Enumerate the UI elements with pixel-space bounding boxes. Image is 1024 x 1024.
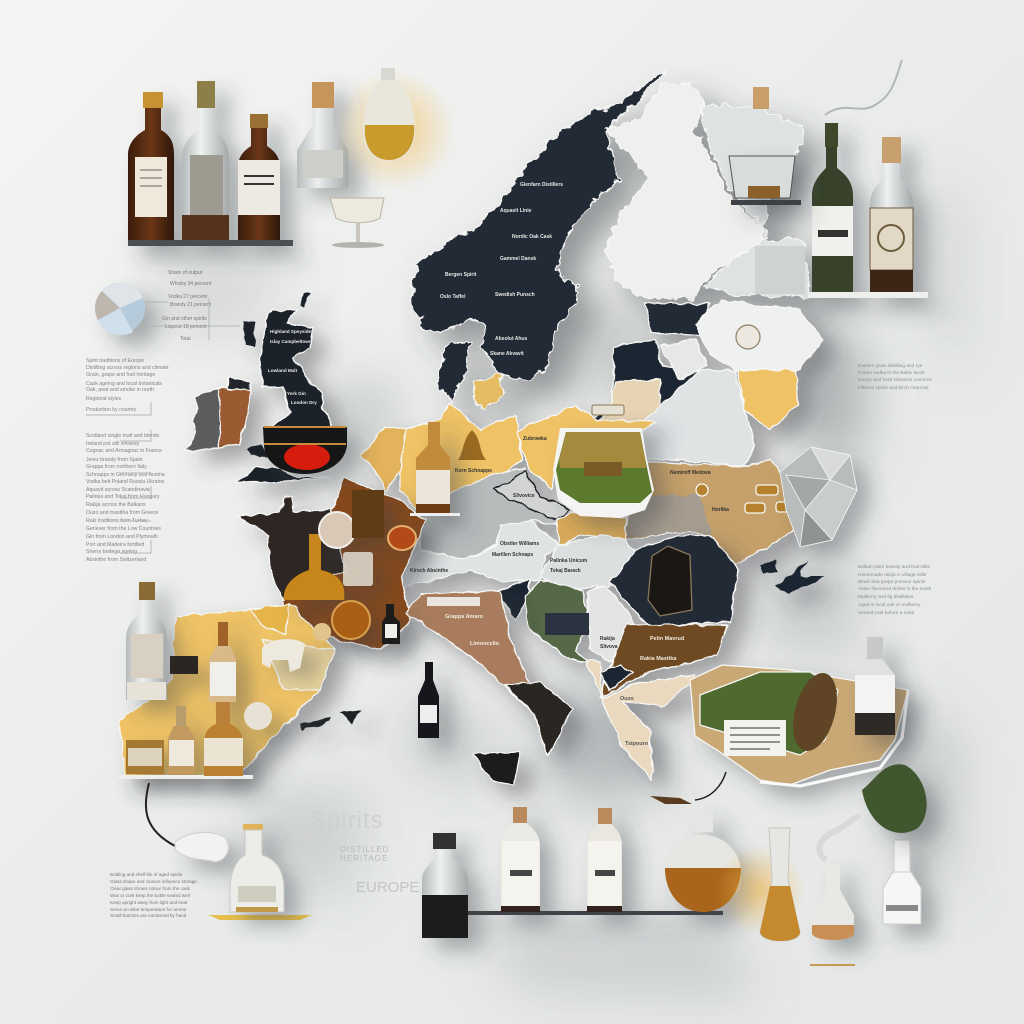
chart annotation text: Gin and other spirits	[162, 316, 207, 322]
country: Ireland west	[185, 388, 220, 450]
UK labels: London Dry	[291, 400, 317, 405]
text block: left column bottom: Aquavit across Scandinavia	[86, 487, 150, 493]
country: Romania	[610, 535, 738, 626]
icon: leaf plate	[175, 832, 228, 862]
country: Netherlands	[360, 428, 406, 492]
text block: left column top: Oak, peat and smoke in north	[86, 387, 154, 393]
text block: left column top: Cask ageing and local botanicals	[86, 381, 162, 387]
flask: small	[812, 864, 854, 940]
map details: Norway labels: Swedish Punsch	[495, 292, 535, 298]
mini building relief	[755, 246, 805, 294]
text block: right top: Honey and herb infusions common	[858, 377, 932, 383]
Ulster dark cap	[228, 378, 250, 391]
embossed heading: EUROPE	[356, 879, 419, 896]
text block: right middle: Anise flavoured drinks in the south	[858, 586, 932, 592]
chart annotation text: Share of output	[168, 270, 203, 276]
Hebrides	[243, 293, 311, 457]
icon: smoke curl	[819, 815, 860, 860]
picture: forest landscape	[553, 428, 654, 518]
text block: bottom left: Wax or cork keep the bottle sealed well	[110, 893, 190, 898]
Sicily	[472, 752, 520, 784]
Central Europe labels: Marillen Schnaps	[492, 552, 533, 558]
bottle: slim	[209, 622, 236, 702]
Central Europe labels	[410, 436, 729, 650]
Central Europe labels: Slivovice	[513, 493, 535, 499]
country: Croatia and Serbia	[525, 580, 590, 662]
bottle: Germany	[410, 422, 460, 516]
chart annotation text: Brandy 21 percent	[170, 302, 211, 308]
text block: right top: Potato vodka in the Baltic lands	[858, 370, 926, 376]
country: Bulgaria north	[587, 585, 642, 662]
amber bottle illustration	[648, 546, 692, 616]
small gold bar	[810, 964, 855, 966]
country: north Russia	[700, 105, 810, 296]
brass knobs	[696, 484, 796, 513]
text block: bottom left: Clear glass shows colour from the cask	[110, 886, 191, 891]
UK labels: Lowland Malt	[268, 368, 298, 373]
bottle cluster: France	[284, 490, 416, 644]
text block: left column bottom: Rakija across the Balkans	[86, 502, 146, 508]
text block: left column bottom: Scotland single malt and blends	[86, 433, 160, 439]
bottle: white label	[501, 807, 540, 912]
text block: right middle: Served cold before a meal	[858, 610, 914, 616]
text block: bottom left: Serve at cellar temperature for aroma	[110, 907, 187, 912]
bottle: white cosmetic	[883, 840, 921, 924]
embossed heading: HERITAGE	[340, 854, 388, 863]
Central Europe labels: Zubrowka	[523, 436, 547, 442]
country: Belarus	[640, 370, 755, 466]
map details: Norway labels: Skane Akvavit	[490, 351, 524, 357]
country: Bulgaria brown	[600, 625, 727, 697]
country: Great Britain	[260, 310, 332, 428]
bottle: brown with label	[238, 114, 280, 240]
Italy dark south	[505, 682, 572, 756]
text block: right top: Eastern grain distilling and rye	[858, 363, 923, 369]
text block: right middle: Homemade rakija in village stills	[858, 572, 927, 578]
text block: left column bottom: Cognac and Armagnac in France	[86, 448, 162, 454]
map details: Norway labels	[440, 182, 563, 357]
chart annotation text: Vodka 27 percent	[168, 294, 208, 300]
bottle label	[416, 470, 450, 504]
Italy labels: Limoncello	[470, 641, 500, 647]
bottle: right shelf	[855, 637, 895, 735]
country: Latvia and Lithuania	[590, 340, 700, 426]
chart: pie	[95, 283, 145, 335]
map details: Norway labels: Nordic Oak Cask	[512, 234, 552, 240]
line: sea connector	[695, 772, 726, 800]
glass: coupe	[330, 198, 384, 248]
text block: left column bottom: Palinka and Tokaj from Hungary	[86, 494, 160, 500]
shelf	[128, 240, 293, 246]
pie slice: white	[102, 283, 143, 308]
Central Europe labels: Tokaj Barack	[550, 568, 581, 574]
round seal	[244, 702, 272, 730]
group: bottom left decanter	[146, 783, 312, 920]
bottle: amber decanter	[284, 534, 344, 600]
glow: beaker	[715, 845, 805, 935]
panel: Baltic and east	[590, 300, 823, 565]
country: Turkey	[690, 665, 908, 785]
card lines	[730, 728, 780, 749]
country: France east brown	[282, 478, 425, 650]
left column rules	[86, 402, 151, 553]
text block: left column bottom: Vodka belt Poland Russia Ukraine	[86, 479, 165, 485]
text block: right middle	[858, 564, 932, 616]
text block: left column bottom: Ouzo and mastiha from Greece	[86, 510, 158, 516]
jar: dark label	[126, 740, 164, 774]
cork barrel disc	[319, 512, 355, 548]
country: Spain	[120, 604, 335, 776]
Italy labels	[445, 614, 684, 747]
text block: left column top: Regional styles	[86, 396, 122, 402]
text block: left column top: Grain, grape and fruit heritage	[86, 372, 155, 378]
shaded part of Ukraine	[627, 495, 712, 538]
bull figure	[262, 639, 305, 672]
shelf	[410, 513, 460, 516]
shelf edge	[760, 690, 908, 786]
green landscape	[700, 672, 838, 755]
group: Spain bottles	[118, 582, 305, 779]
Central Europe labels: Nemiroff Medova	[670, 470, 711, 476]
background wall shading	[150, 180, 965, 1000]
text card	[724, 720, 786, 756]
chart annotation text	[162, 270, 212, 342]
text block: right middle: Black Sea grape pomace spirits	[858, 579, 926, 585]
country: Finland	[604, 84, 770, 300]
amber lid	[332, 601, 370, 639]
Italy title card	[427, 597, 480, 606]
chart annotation text: Whisky 34 percent	[170, 281, 212, 287]
map details: Norway labels: Aquavit Linie	[500, 208, 532, 214]
text block: bottom left: Bottling and shelf life of aged spirits	[110, 872, 183, 877]
text block: right middle: Mulberry and fig distillates	[858, 594, 914, 600]
label card: Bosnia	[545, 613, 589, 635]
bottle base	[416, 504, 450, 513]
Sardinia and Balearics	[300, 710, 362, 730]
shelf group: top right bottles	[808, 123, 928, 298]
glass: whisky tumbler	[729, 156, 801, 205]
country: Albania	[600, 664, 632, 690]
country: south Spain cream	[262, 640, 335, 690]
icon: amber decanter on Britain	[263, 427, 347, 474]
icon: brass cask handle	[592, 405, 624, 415]
text block: left column bottom: Sherry bodega ageing	[86, 549, 137, 555]
Central Europe labels: Rakija	[600, 636, 615, 642]
Central Europe labels: Horilka	[712, 507, 729, 513]
text block: left column bottom: Genever from the Low Countries	[86, 526, 161, 532]
UK labels: Highland Speyside	[270, 329, 312, 334]
Central Europe labels: Slivova	[600, 644, 618, 650]
small white gauge	[736, 325, 760, 349]
panel: Turkey	[690, 665, 908, 786]
country: Germany	[400, 402, 522, 512]
country: Estonia	[646, 303, 710, 335]
rock texture	[785, 668, 845, 756]
text block: left column top	[86, 358, 169, 413]
tube: curving pipe	[825, 60, 902, 115]
Wales and south coast	[235, 467, 330, 483]
bottle: large clear	[126, 582, 167, 700]
country: Norway and Sweden	[411, 72, 664, 381]
sky and tree canopy	[559, 432, 646, 468]
embossed heading: DISTILLED	[340, 845, 389, 854]
geometric faceted sculpture	[780, 447, 857, 547]
panel: France and Benelux	[237, 478, 425, 650]
bottle label	[420, 705, 437, 723]
country: Russia west	[695, 300, 823, 373]
shelf: bottom	[465, 911, 723, 915]
pie slice: beige	[95, 291, 120, 320]
country: Austria and Switzerland	[396, 520, 560, 588]
Italy labels: Tsipouro	[625, 741, 649, 747]
map details: Norway labels: Absolut Ahus	[495, 336, 528, 342]
bottle: dark Italy	[418, 662, 439, 738]
dark label	[170, 656, 198, 674]
text block: right middle: Balkan plum brandy and fruit stills	[858, 564, 930, 570]
painted scene	[556, 432, 652, 503]
panel: Central Europe	[360, 402, 738, 780]
bottle: green wine	[812, 123, 853, 292]
Central Europe labels: Kirsch Absinthe	[410, 568, 448, 574]
text block: right top	[858, 363, 932, 391]
UK labels: York Gin	[287, 391, 306, 396]
country: Poland	[518, 405, 656, 490]
label card: Lithuania	[598, 380, 660, 424]
map details: Norway labels: Bergen Spirit	[445, 272, 477, 278]
icon: brass bell	[458, 430, 486, 460]
country: Italy	[405, 590, 572, 756]
flask: tall beaker	[760, 828, 800, 941]
island: Crete	[650, 796, 692, 804]
embossed heading	[310, 807, 419, 896]
text block: left column bottom: Schnapps in Germany and Austria	[86, 472, 165, 478]
map details: Norway labels: Gammel Dansk	[500, 256, 536, 262]
map details: Norway labels: Glenfarn Distillers	[520, 182, 563, 188]
text block: left column bottom: Raki traditions from Turkey	[86, 518, 148, 524]
bottle: top right neck	[753, 87, 769, 109]
flask: amber round	[335, 68, 455, 190]
red liquid	[284, 444, 330, 470]
Italy labels: Rakia Mastika	[640, 656, 677, 662]
bottle: clear decanter	[230, 824, 284, 912]
bottle: small label	[382, 604, 400, 644]
islands: Denmark	[472, 376, 504, 408]
embossed heading: Spirits	[310, 807, 384, 834]
group: bottom bottles	[422, 637, 921, 940]
bottle: clear with label	[182, 81, 229, 240]
Central Europe labels: Palinka Unicum	[550, 558, 588, 564]
cabin	[584, 462, 622, 476]
pie slice: pale	[98, 308, 133, 335]
text block: left column bottom: Grappa from northern Italy	[86, 464, 147, 470]
text block: left column top: Distilling across regions and climate	[86, 365, 169, 371]
Italy labels: Pelin Mavrud	[650, 636, 684, 642]
shelf: right	[808, 292, 928, 298]
shelf: Spain	[118, 775, 253, 779]
small round label	[313, 623, 331, 641]
flask: amber round	[665, 812, 741, 912]
bottle: amber with label	[204, 702, 243, 776]
country: France west	[237, 497, 345, 605]
country: Greece	[586, 660, 695, 780]
gold rings	[264, 427, 346, 444]
country: Ireland east	[218, 378, 250, 447]
chart annotation text: Total	[180, 336, 191, 342]
Italy labels: Grappa Amaro	[445, 614, 484, 620]
text block: left column bottom: Jerez brandy from Spain	[86, 457, 143, 463]
cable	[146, 783, 175, 846]
text block: left column top: Production by country	[86, 407, 137, 413]
country: Slovakia	[556, 512, 626, 546]
country: Hungary	[540, 535, 640, 590]
text block: left column bottom: Ireland pot still whiskey	[86, 441, 140, 447]
panel: Scandinavia	[411, 72, 810, 408]
country: Belarus north	[660, 340, 706, 380]
Central Europe labels: Korn Schnapps	[455, 468, 492, 474]
text block: left column bottom: Port and Madeira fortified	[86, 542, 144, 548]
map details: Norway labels: Oslo Taffel	[440, 294, 466, 300]
panel: UK and Ireland	[185, 293, 332, 483]
text block: bottom left: Small batches are numbered by hand	[110, 913, 187, 918]
text block: right top: Filtered spirits and birch charcoal	[858, 385, 928, 391]
panel: Italy	[300, 590, 572, 784]
UK labels	[268, 329, 317, 405]
map of Europe	[120, 72, 908, 786]
text block: right middle: Aged in local oak or mulberry	[858, 602, 921, 608]
still	[352, 490, 384, 538]
country: central grey	[420, 468, 562, 560]
text block: left column bottom: Absinthe from Switzerland	[86, 557, 146, 563]
text block: left column bottom	[86, 433, 165, 563]
red jar	[388, 526, 416, 550]
text block: left column bottom: Gin from London and Plymouth	[86, 534, 158, 540]
country: Denmark	[439, 342, 470, 400]
leader lines	[145, 298, 240, 340]
country: Slovenia coast	[497, 580, 530, 620]
panel: Iberia	[120, 604, 335, 776]
icon: green leaf	[862, 764, 927, 833]
country: Ukraine	[625, 460, 806, 565]
bottle: dark whisky	[128, 92, 174, 240]
text block: bottom left: Keep upright away from light and heat	[110, 900, 188, 905]
small bottle label	[385, 624, 397, 638]
bottle: clear with wreath	[870, 137, 913, 292]
shelf: decanter	[208, 915, 312, 920]
Italy labels: Ouzo	[620, 696, 634, 702]
UK labels: Islay Campbeltown	[270, 339, 312, 344]
bottle: small cream	[168, 706, 195, 774]
bottle: black striped	[422, 833, 468, 938]
country: Czechia	[494, 470, 570, 520]
country: Pyrenees	[250, 604, 290, 635]
shelf group: top left bottles	[128, 81, 293, 246]
Central Europe labels: Obstler Williams	[500, 541, 539, 547]
text block: bottom left	[110, 872, 197, 918]
glass jar	[343, 552, 373, 586]
text block: bottom left: Glass shape and closure influence storage	[110, 879, 197, 884]
bottle: clear top	[297, 82, 348, 188]
text block: left column top: Spirit traditions of Europe	[86, 358, 144, 364]
black sea islands	[760, 560, 825, 595]
country: yellow region	[738, 370, 798, 430]
bottle: white label two	[587, 808, 622, 912]
chart annotation text: Liqueur 18 percent	[165, 324, 207, 330]
